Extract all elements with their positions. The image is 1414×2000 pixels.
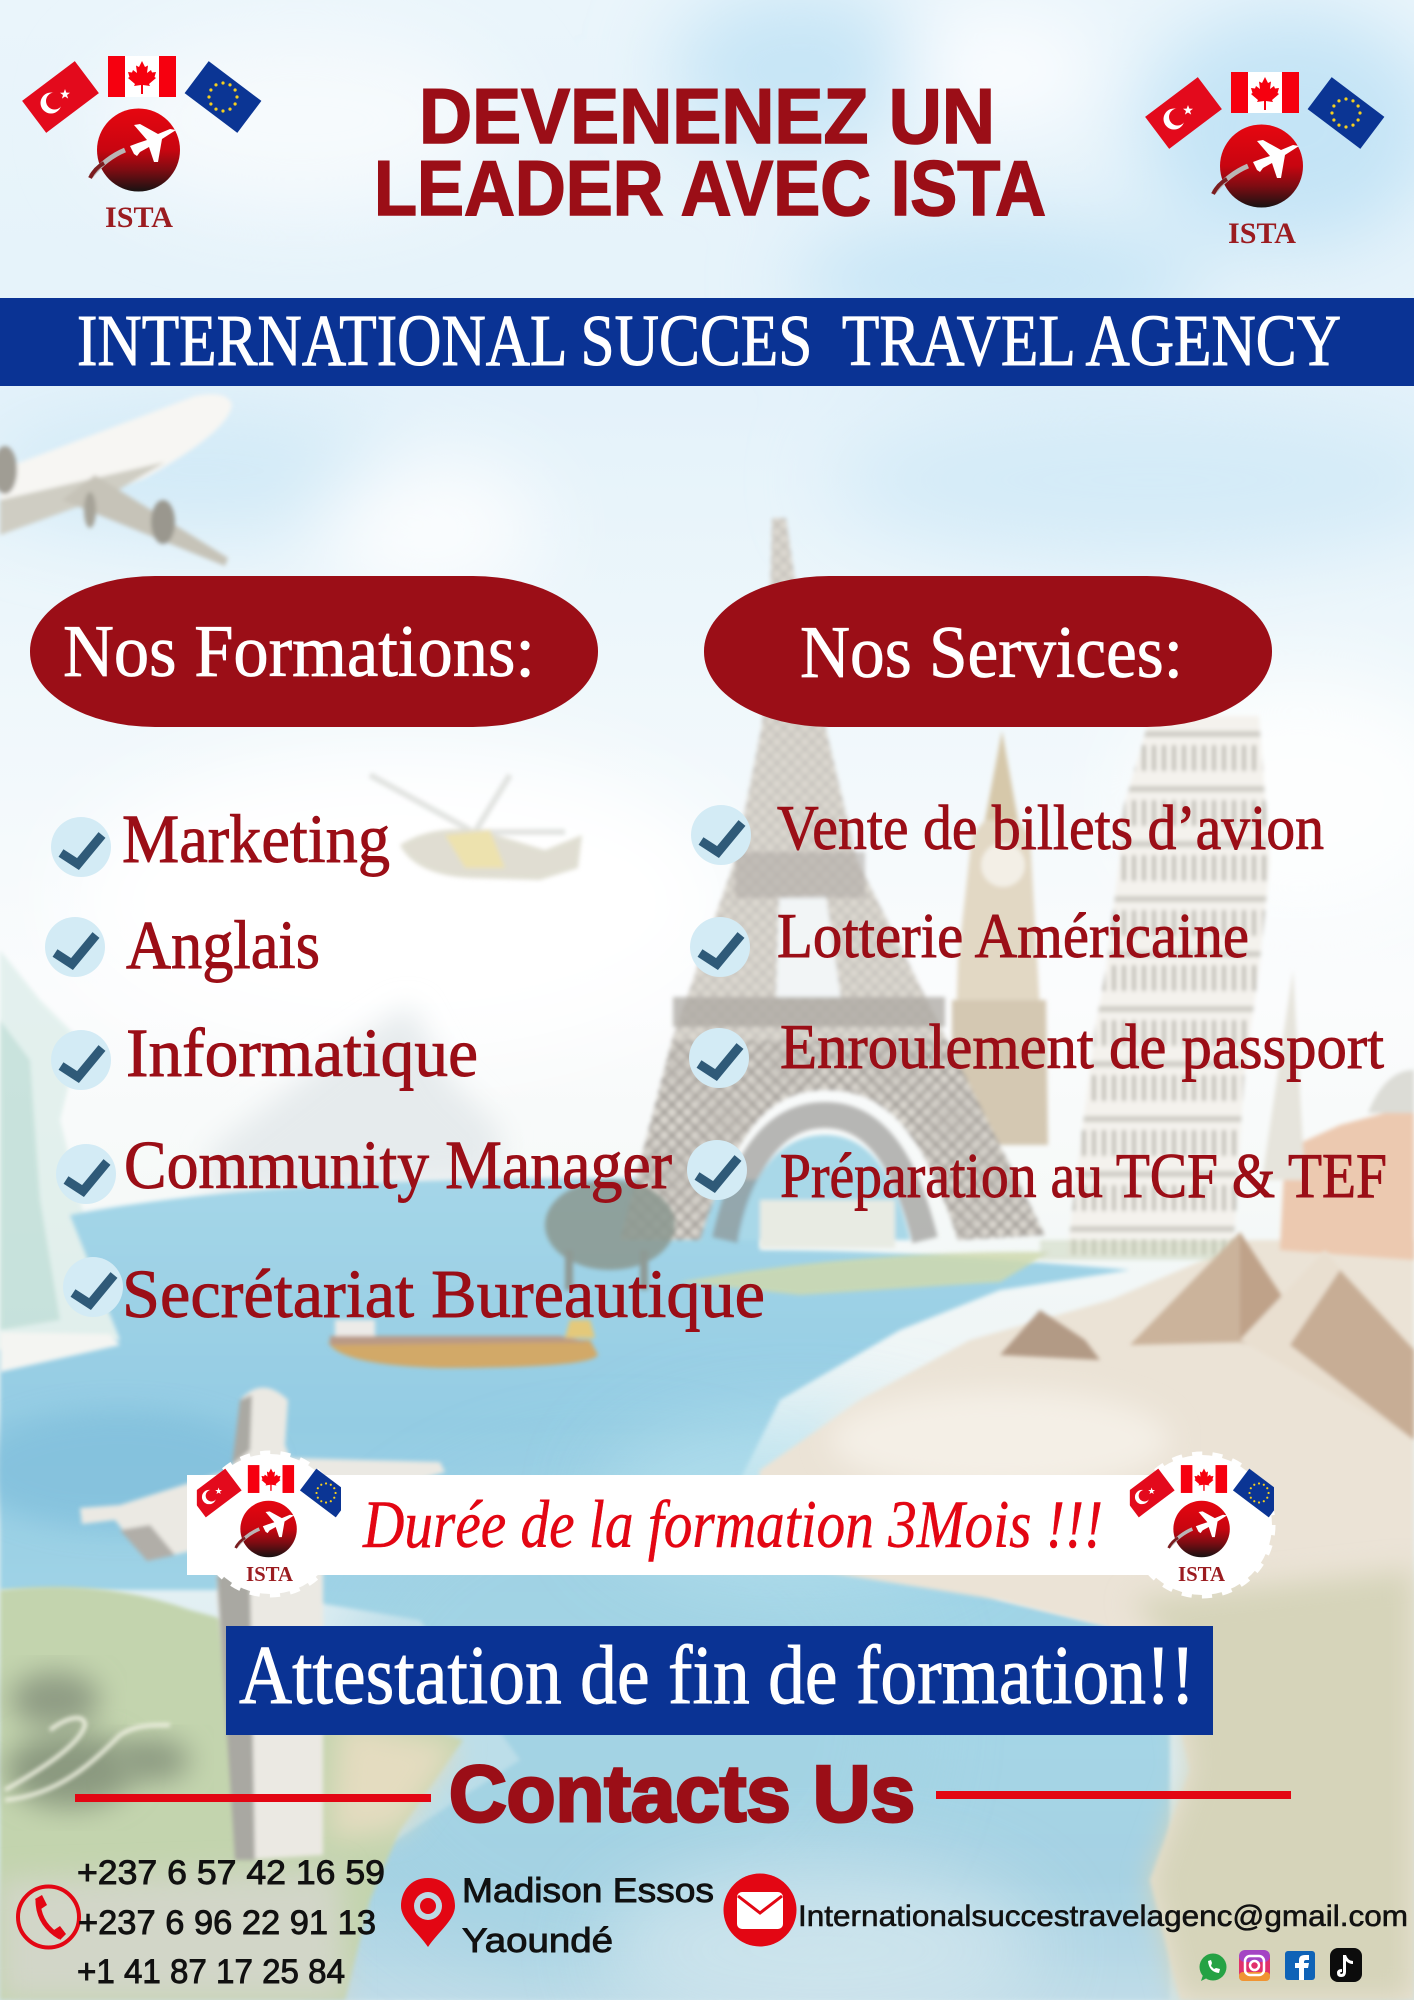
icon: phone	[18, 1886, 79, 1948]
Christ statue	[80, 1388, 445, 1860]
heading pill: Nos Formations: Nos Formations:	[63, 611, 535, 693]
check: Lotterie	[690, 917, 750, 977]
icon: whatsapp	[1200, 1954, 1226, 1981]
check: Community Manager	[56, 1144, 116, 1204]
logo: top right: ISTA	[1228, 217, 1296, 250]
water	[0, 1178, 1170, 2000]
logo: top left: ISTA	[105, 201, 173, 234]
check: Vente de billets	[691, 805, 751, 865]
Pisa tower	[1067, 716, 1270, 1255]
check: Préparation	[687, 1140, 747, 1200]
certificate banner: Attestation de fin de formation!!	[239, 1629, 1195, 1722]
title: LEADER AVEC ISTA	[374, 144, 1046, 232]
heading pill: Nos Services	[704, 576, 1272, 727]
list: services	[687, 793, 1387, 1211]
trees and shore	[545, 1180, 1240, 1295]
contacts heading: Contacts Us	[449, 1749, 915, 1838]
icon: instagram	[1239, 1950, 1270, 1981]
item: Vente de billets: Vente de billets d’avion	[777, 793, 1324, 863]
Big Ben	[952, 731, 1048, 1145]
item: Marketing: Marketing	[122, 801, 390, 877]
check: Informatique	[51, 1030, 111, 1090]
heading pill: Nos Formations	[30, 576, 598, 727]
list: formations	[45, 801, 765, 1332]
item: Secrétariat Bureautique: Secrétariat Bureautique	[122, 1256, 765, 1332]
email address: Internationalsuccestravelagenc@gmail.com	[798, 1900, 1408, 1933]
duration text: Durée de la formation 3Mois !!!	[362, 1486, 1103, 1562]
duration banner	[187, 1454, 1285, 1595]
logo: top right	[1145, 72, 1384, 250]
address text: Madison Essos	[462, 1872, 714, 1910]
contact: phones: +237 6 96 22 91 13	[78, 1904, 376, 1942]
item: Informatique: Informatique	[126, 1015, 478, 1091]
badge logo right: ISTA	[1178, 1562, 1226, 1586]
contact: address	[401, 1872, 714, 1960]
pyramids	[1000, 1232, 1414, 1440]
contact: address: Yaoundé	[462, 1922, 613, 1960]
land left	[0, 1587, 463, 2000]
social icons	[1200, 1948, 1362, 1982]
title	[374, 72, 1046, 232]
title: DEVENENEZ UN	[419, 72, 995, 160]
icon: facebook	[1285, 1951, 1315, 1980]
icon: location pin	[401, 1878, 455, 1947]
right side buildings	[1262, 970, 1414, 1260]
land right	[750, 1240, 1414, 2000]
check: Anglais	[45, 917, 105, 977]
icon: tiktok	[1330, 1948, 1362, 1982]
helicopter	[370, 775, 582, 880]
icon: envelope	[724, 1874, 796, 1946]
badge logo left: ISTA	[246, 1562, 294, 1586]
item: Lotterie: Lotterie Américaine	[777, 901, 1249, 971]
Eiffel tower	[620, 518, 1045, 1248]
check: Marketing	[51, 817, 111, 877]
statue of liberty	[0, 950, 120, 1370]
contact: phones	[18, 1854, 385, 1991]
contact: phones: +1 41 87 17 25 84	[77, 1953, 345, 1991]
heading pill: Nos Services: Nos Services:	[800, 612, 1183, 694]
logo: top left	[22, 56, 261, 234]
distant mountain	[210, 1005, 500, 1200]
check: Secrétariat Bureautique	[63, 1257, 123, 1317]
item: Community Manager: Community Manager	[124, 1127, 672, 1203]
check: Enroulement	[689, 1028, 749, 1088]
item: Enroulement: Enroulement de passport	[780, 1012, 1384, 1082]
contacts heading	[75, 1749, 1291, 1838]
airplane	[0, 394, 232, 566]
phone numbers: +237 6 57 42 16 59	[77, 1854, 385, 1892]
boat	[328, 1320, 598, 1368]
contact: email	[724, 1874, 1408, 1946]
badge logo right	[1122, 1455, 1285, 1595]
badge logo left	[189, 1454, 352, 1594]
item: Anglais: Anglais	[126, 907, 320, 983]
